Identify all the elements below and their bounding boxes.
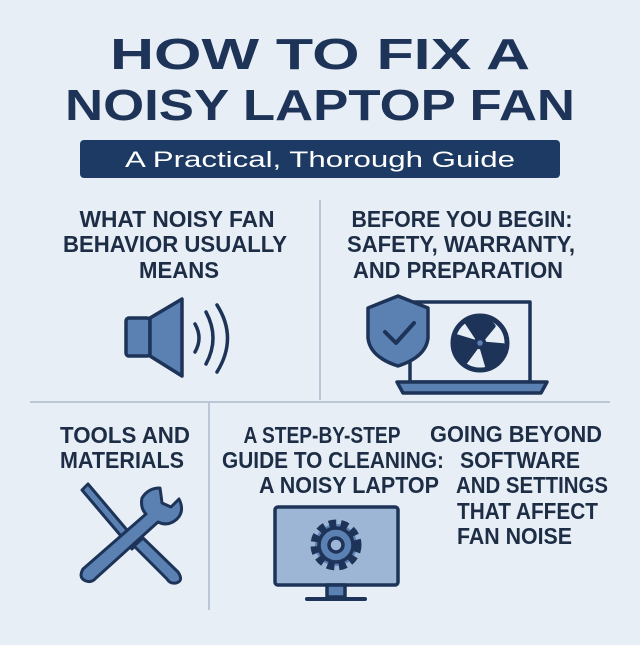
title: HOW TO FIX A [110,30,530,79]
heading: going beyond: AND SETTINGS [456,472,608,498]
heading: step-by-step guide [222,422,444,498]
heading: going beyond: GOING BEYOND [430,421,602,447]
icon: speaker [126,299,228,376]
heading: step-by-step guide: A NOISY LAPTOP [259,472,439,498]
title: NOISY LAPTOP FAN [65,81,575,130]
heading: what noisy fan behavior: MEANS [139,257,219,283]
heading: going beyond: FAN NOISE [457,523,572,549]
heading: before you begin: AND PREPARATION [353,257,563,283]
heading: before you begin: BEFORE YOU BEGIN: [352,206,572,232]
subtitle banner: A Practical, Thorough Guide [125,147,515,172]
heading: tools and materials: MATERIALS [60,447,184,473]
heading: what noisy fan behavior: WHAT NOISY FAN [80,206,274,232]
heading: going beyond: SOFTWARE [460,447,580,473]
heading: step-by-step guide: GUIDE TO CLEANING: [222,447,444,473]
heading: before you begin: SAFETY, WARRANTY, [347,231,575,257]
heading: going beyond: THAT AFFECT [457,498,598,524]
heading: what noisy fan behavior: BEHAVIOR USUALLY [63,231,287,257]
icon: shield and laptop fan [368,296,547,393]
icon: screwdriver and wrench [81,484,182,583]
heading: going beyond [430,421,608,549]
icon: monitor with gear [275,507,398,599]
heading: tools and materials: TOOLS AND [60,422,190,448]
heading: what noisy fan behavior [63,206,287,283]
heading: before you begin [347,206,575,283]
heading: tools and materials [60,422,190,473]
subtitle banner [80,140,560,178]
title [65,30,575,130]
heading: step-by-step guide: A STEP-BY-STEP [244,422,400,448]
